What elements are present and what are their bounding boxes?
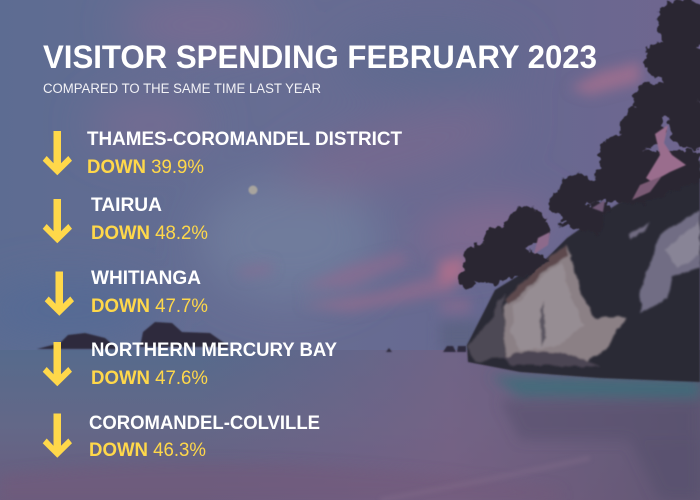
cliff rock faces: [467, 210, 700, 366]
row: Tairua: [43, 194, 208, 244]
value: down 47.6%: DOWN 47.6%: [91, 367, 208, 389]
row: Thames-Coromandel District: [43, 128, 402, 178]
label: Tairua: TAIRUA: [91, 194, 162, 216]
subtitle: COMPARED TO THE SAME TIME LAST YEAR: [43, 81, 321, 96]
label: Whitianga: WHITIANGA: [91, 267, 201, 289]
value: down 48.2%: DOWN 48.2%: [91, 222, 208, 244]
title: VISITOR SPENDING FEBRUARY 2023: [43, 39, 597, 75]
label: Coromandel-Colville: COROMANDEL-COLVILLE: [89, 412, 320, 434]
icon: down arrow: [43, 414, 72, 458]
value: down 39.9%: DOWN 39.9%: [87, 156, 204, 178]
cliff and trees: [459, 0, 700, 382]
distant islands: [37, 322, 466, 352]
row: Coromandel-Colville: [43, 412, 320, 461]
row: Whitianga: [45, 267, 208, 317]
label: Thames-Coromandel District: THAMES-COROMANDEL DISTRICT: [87, 128, 402, 150]
sky gaps between trees: [534, 125, 686, 254]
icon: down arrow: [43, 342, 72, 386]
value: down 47.7%: DOWN 47.7%: [91, 295, 208, 317]
value: down 46.3%: DOWN 46.3%: [89, 439, 206, 461]
icon: down arrow: [43, 131, 72, 175]
icon: down arrow: [45, 272, 74, 316]
trees: [459, 0, 700, 289]
cliff base shadow: [467, 160, 700, 382]
icon: down arrow: [43, 199, 72, 243]
moon: [248, 186, 258, 194]
row: Northern Mercury Bay: [43, 339, 337, 389]
label: Northern Mercury Bay: NORTHERN MERCURY BAY: [91, 339, 337, 361]
